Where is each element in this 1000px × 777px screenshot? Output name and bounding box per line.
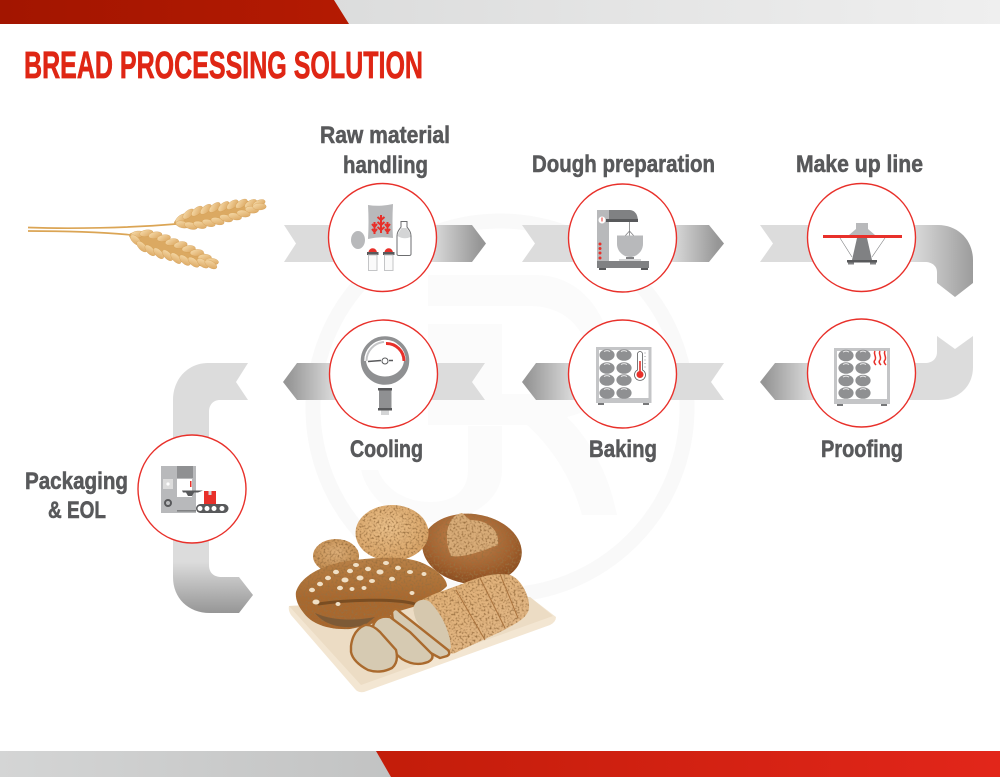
label: packaging and EOL: & EOL [48, 497, 106, 524]
image: wheat ears [28, 191, 269, 279]
icon: salt shakers [367, 248, 394, 270]
arrow: raw material to dough [284, 225, 486, 262]
label: packaging and EOL: Packaging [25, 468, 128, 495]
label: raw material handling: handling [343, 152, 428, 179]
arrow: cooling [283, 363, 485, 400]
bread slice 1 [351, 625, 397, 672]
icon: stand mixer [597, 210, 649, 270]
bread slice 3 [392, 609, 449, 658]
circle icon: raw material handling [328, 184, 436, 292]
round dark loaf [418, 507, 526, 591]
label: proofing: Proofing [821, 436, 903, 463]
label: raw material handling: Raw material [320, 122, 450, 149]
icon: egg [351, 231, 365, 249]
footer band [0, 751, 1000, 777]
icon: milk bottle [397, 222, 411, 256]
label: dough preparation: Dough preparation [532, 151, 715, 178]
circle icon: proofing [808, 319, 916, 427]
seeded round roll [356, 505, 428, 561]
circle icon: packaging and EOL [138, 435, 246, 543]
arrow: packaging curve [173, 363, 253, 613]
sliced seeded loaf [414, 574, 529, 654]
circle icon: make up line [808, 184, 916, 292]
cutting board [289, 597, 556, 692]
image: bread on cutting board [289, 505, 556, 692]
icon: packaging machine with conveyor [161, 466, 228, 513]
watermark logo [313, 221, 687, 595]
header band [0, 0, 1000, 24]
label: cooling: Cooling [350, 436, 423, 463]
title: BREAD PROCESSING SOLUTION [24, 45, 423, 87]
circle icon: dough preparation [568, 184, 676, 292]
icon: flour bag [368, 204, 393, 239]
label: baking: Baking [589, 436, 657, 463]
label: packaging and EOL [25, 468, 128, 524]
oat topped loaf [296, 558, 447, 629]
label: make up line: Make up line [796, 151, 923, 178]
arrow: make up line curving down [760, 225, 973, 297]
icon: proofing cabinet [834, 350, 890, 406]
arrow: baking [522, 363, 724, 400]
icon: thermometer gauge [362, 338, 408, 415]
seeded small roll [313, 539, 359, 573]
circle icon: cooling [330, 320, 438, 428]
arrow: proofing curve [760, 336, 973, 400]
arrow: dough preparation [522, 225, 724, 262]
icon: oven with thermometer [596, 348, 652, 405]
bread slice 2 [373, 617, 432, 664]
label: raw material handling [320, 122, 450, 179]
icon: make up machine [823, 223, 902, 264]
circle icon: baking [568, 320, 676, 428]
